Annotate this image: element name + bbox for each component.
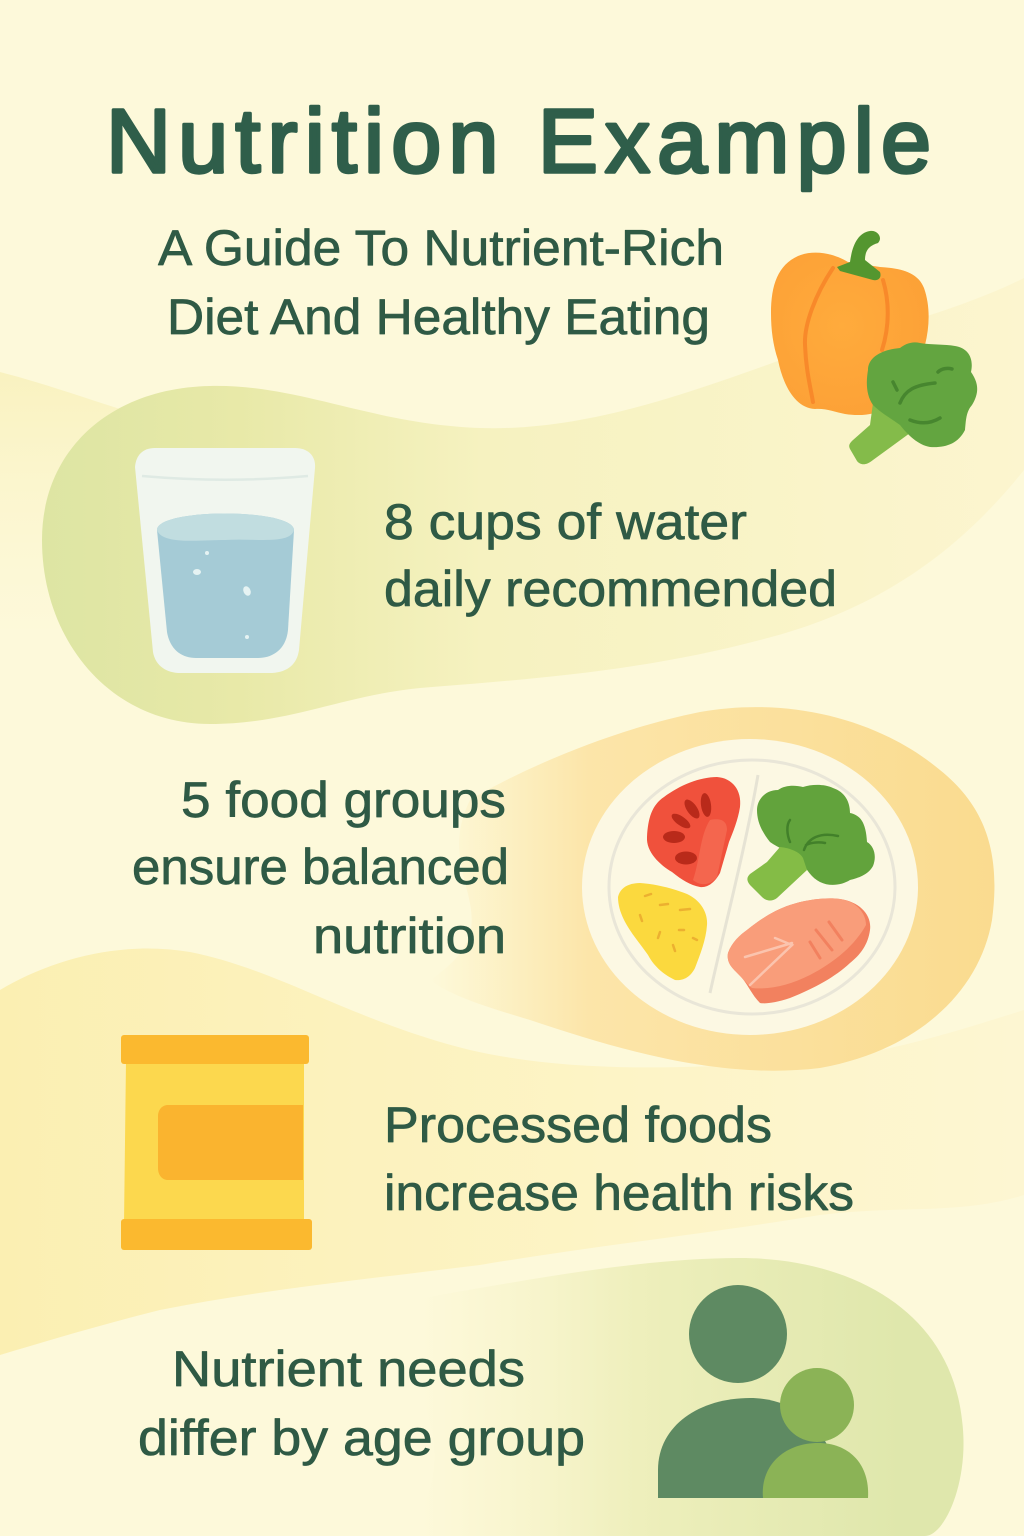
icon: adult and child — [658, 1285, 868, 1498]
text: water — [384, 494, 837, 617]
text: food groups: 5 food groups — [181, 772, 506, 828]
food: broccoli — [747, 785, 875, 901]
icon: pepper and broccoli — [771, 231, 977, 464]
text: processed foods: Processed foods — [384, 1097, 772, 1153]
icon: bell pepper — [771, 231, 929, 415]
text: processed foods: increase health risks — [384, 1165, 854, 1221]
panel: processed food wave — [0, 948, 1024, 1355]
text: water: daily recommended — [384, 561, 837, 617]
icon: broccoli — [849, 342, 977, 464]
subtitle: A Guide To Nutrient-Rich — [158, 220, 724, 276]
subtitle — [158, 220, 724, 345]
subtitle: Diet And Healthy Eating — [167, 289, 710, 345]
food: tomato — [647, 777, 740, 887]
title: Nutrition Example — [106, 92, 931, 192]
panel: food groups blob — [430, 707, 994, 1071]
text: age group: Nutrient needs — [172, 1341, 525, 1397]
panel: age group blob — [350, 1258, 964, 1536]
icon: plate — [582, 739, 918, 1035]
text: processed foods — [384, 1097, 854, 1221]
text: age group: differ by age group — [138, 1410, 585, 1466]
background wave: top left — [0, 372, 130, 640]
text: age group — [138, 1341, 585, 1466]
food: yellow potato — [618, 883, 707, 980]
text: food groups: ensure balanced — [132, 839, 509, 895]
icon: water glass — [135, 448, 315, 673]
panel: water blob — [42, 278, 1024, 724]
food: salmon — [728, 898, 870, 1003]
text: food groups: nutrition — [313, 908, 506, 964]
icon: packaged food — [121, 1035, 312, 1250]
text: food groups — [132, 772, 509, 964]
text: water: 8 cups of water — [384, 494, 747, 550]
